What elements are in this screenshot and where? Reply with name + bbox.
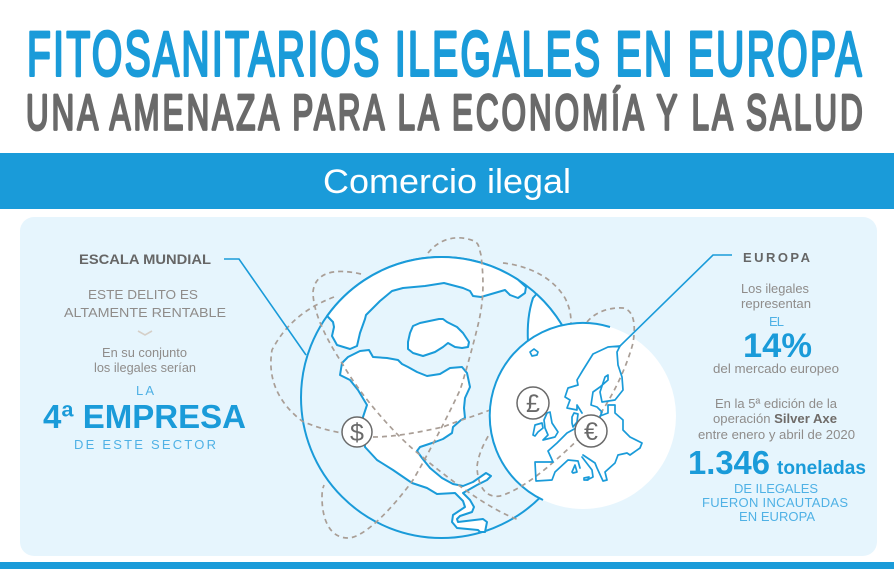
globe illustration xyxy=(271,238,676,538)
europe circle xyxy=(490,323,676,509)
land: central island xyxy=(408,319,469,356)
text: operacion silver axe: operación Silver Axe xyxy=(713,411,837,426)
right text block: europa xyxy=(688,250,866,524)
stat: 4a empresa: 4ª EMPRESA xyxy=(43,398,246,435)
text: este delito es: ESTE DELITO ES xyxy=(88,287,198,302)
land: right sliver xyxy=(528,294,562,342)
text: los ilegales: Los ilegales xyxy=(741,281,809,296)
coin: euro: € xyxy=(584,418,598,446)
stat: 1.346: 1.346 xyxy=(688,444,770,481)
text: del mercado europeo: del mercado europeo xyxy=(713,361,839,376)
europe circle blue arc xyxy=(490,323,610,500)
globe outline xyxy=(301,257,582,538)
text: de ilegales: DE ILEGALES xyxy=(734,481,818,496)
coin: pound: £ xyxy=(526,390,540,418)
text: representan: representan xyxy=(741,296,811,311)
ireland xyxy=(533,423,543,436)
coin: pound xyxy=(517,387,549,419)
subtitle: UNA AMENAZA PARA LA ECONOMÍA Y LA SALUD xyxy=(26,84,863,140)
text: en europa: EN EUROPA xyxy=(739,509,815,524)
great britain xyxy=(543,412,558,440)
section band: comercio ilegal xyxy=(0,153,894,209)
dashed route: large loop xyxy=(322,238,483,538)
leader line: escala mundial xyxy=(224,259,306,355)
coin: euro xyxy=(575,415,607,447)
coin: dollar: $ xyxy=(350,419,364,447)
dashed route: left loop to lower right xyxy=(313,271,519,520)
text: de este sector: DE ESTE SECTOR xyxy=(74,437,216,452)
dashed route: top right xyxy=(503,263,571,323)
icon: chevron xyxy=(138,331,152,335)
continental europe xyxy=(535,405,642,481)
text: en su conjunto: En su conjunto xyxy=(102,345,187,360)
dashed route: through the dollar coin xyxy=(271,297,490,437)
text: entre enero y abril: entre enero y abril de 2020 xyxy=(698,427,855,442)
section band: comercio ilegal: Comercio ilegal xyxy=(323,163,571,201)
sicily xyxy=(584,477,589,480)
heading: escala mundial: ESCALA MUNDIAL xyxy=(79,251,211,267)
iceland xyxy=(530,349,538,356)
scandinavia xyxy=(565,346,623,417)
left text block: escala mundial xyxy=(43,251,246,452)
panel background xyxy=(20,217,877,556)
text: fueron incautadas: FUERON INCAUTADAS xyxy=(702,495,848,510)
corsica xyxy=(572,465,577,473)
bottom band xyxy=(0,562,894,569)
land: northern arc xyxy=(327,257,526,349)
stat: 14 percent: 14% xyxy=(743,327,812,365)
denmark xyxy=(572,413,578,427)
text: altamente rentable: ALTAMENTE RENTABLE xyxy=(64,305,226,320)
land: main continent xyxy=(340,350,491,532)
dashed route: europe crossing xyxy=(477,308,634,496)
heading: europa: EUROPA xyxy=(743,250,811,265)
coin: dollar xyxy=(342,417,372,447)
leader line: europa xyxy=(620,255,732,346)
text: los ilegales serian: los ilegales serían xyxy=(94,360,196,375)
stat: toneladas: toneladas xyxy=(777,458,866,479)
title: FITOSANITARIOS ILEGALES EN EUROPA xyxy=(27,20,862,90)
europe map xyxy=(530,346,642,481)
text: en la 5a edicion: En la 5ª edición de la xyxy=(715,396,838,411)
text: el: EL xyxy=(769,314,784,329)
text: la: LA xyxy=(136,383,154,398)
